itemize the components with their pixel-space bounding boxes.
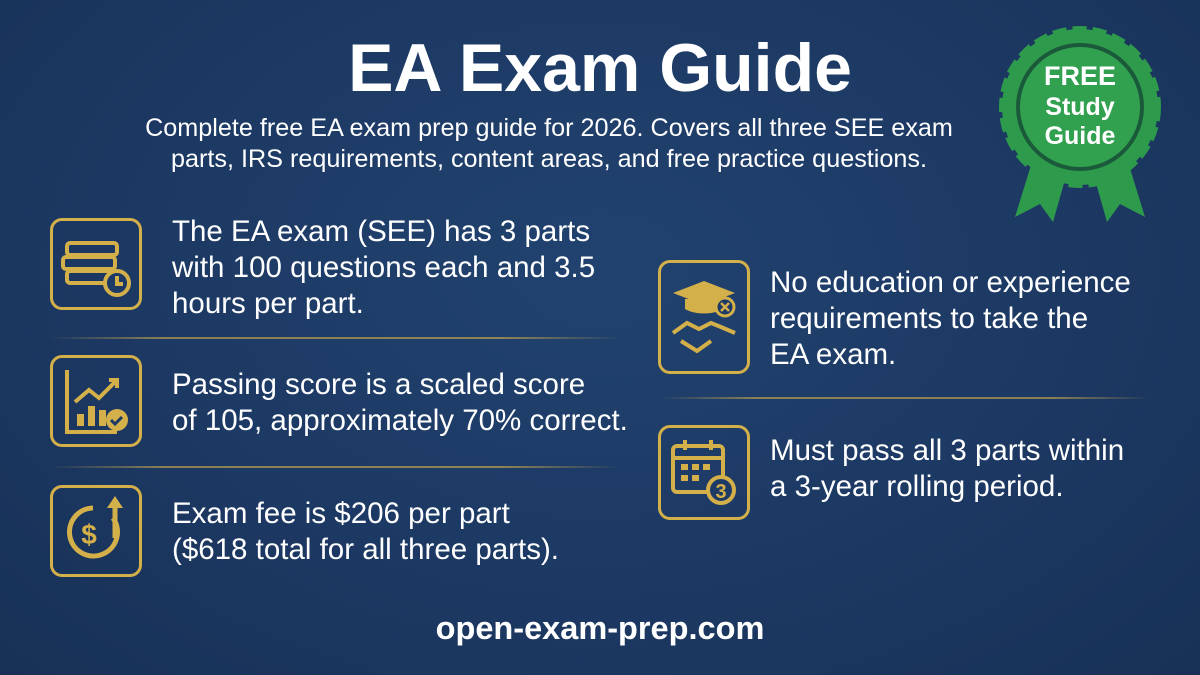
- icon: calendar: 3: [715, 481, 727, 503]
- subtitle: Complete free EA exam prep guide for 2026. Covers all three SEE exam: [145, 114, 953, 142]
- text 1: [172, 215, 595, 320]
- icon: books clock: [50, 218, 142, 310]
- text 4: [770, 266, 1131, 371]
- text 5: [770, 434, 1124, 503]
- icon: graduation handshake: [658, 260, 750, 374]
- badge: free study guide: [999, 26, 1161, 222]
- text 5: a 3-year rolling period.: [770, 470, 1064, 503]
- icon: calendar: [658, 425, 750, 520]
- subtitle: parts, IRS requirements, content areas, and free practice questions.: [171, 145, 927, 173]
- text 3: [172, 497, 559, 566]
- badge: free study guide: Study: [1045, 93, 1115, 121]
- icon: dollar: [50, 485, 142, 577]
- text 5: Must pass all 3 parts within: [770, 434, 1124, 467]
- text 4: EA exam.: [770, 338, 896, 371]
- icon: chart: [50, 355, 142, 447]
- text 2: of 105, approximately 70% correct.: [172, 404, 628, 437]
- text 2: [172, 368, 628, 437]
- text 3: ($618 total for all three parts).: [172, 533, 559, 566]
- subtitle: [145, 114, 953, 173]
- text 3: Exam fee is $206 per part: [172, 497, 510, 530]
- text 2: Passing score is a scaled score: [172, 368, 585, 401]
- title: EA Exam Guide: [348, 30, 852, 106]
- badge: free study guide: FREE: [1044, 61, 1116, 91]
- text 4: requirements to take the: [770, 302, 1088, 335]
- text 1: The EA exam (SEE) has 3 parts: [172, 215, 590, 248]
- footer url: open-exam-prep.com: [436, 610, 764, 646]
- badge: free study guide: Guide: [1045, 122, 1116, 150]
- text 1: with 100 questions each and 3.5: [172, 251, 595, 284]
- icon: dollar: $: [81, 519, 97, 550]
- text 1: hours per part.: [172, 287, 364, 320]
- text 4: No education or experience: [770, 266, 1131, 299]
